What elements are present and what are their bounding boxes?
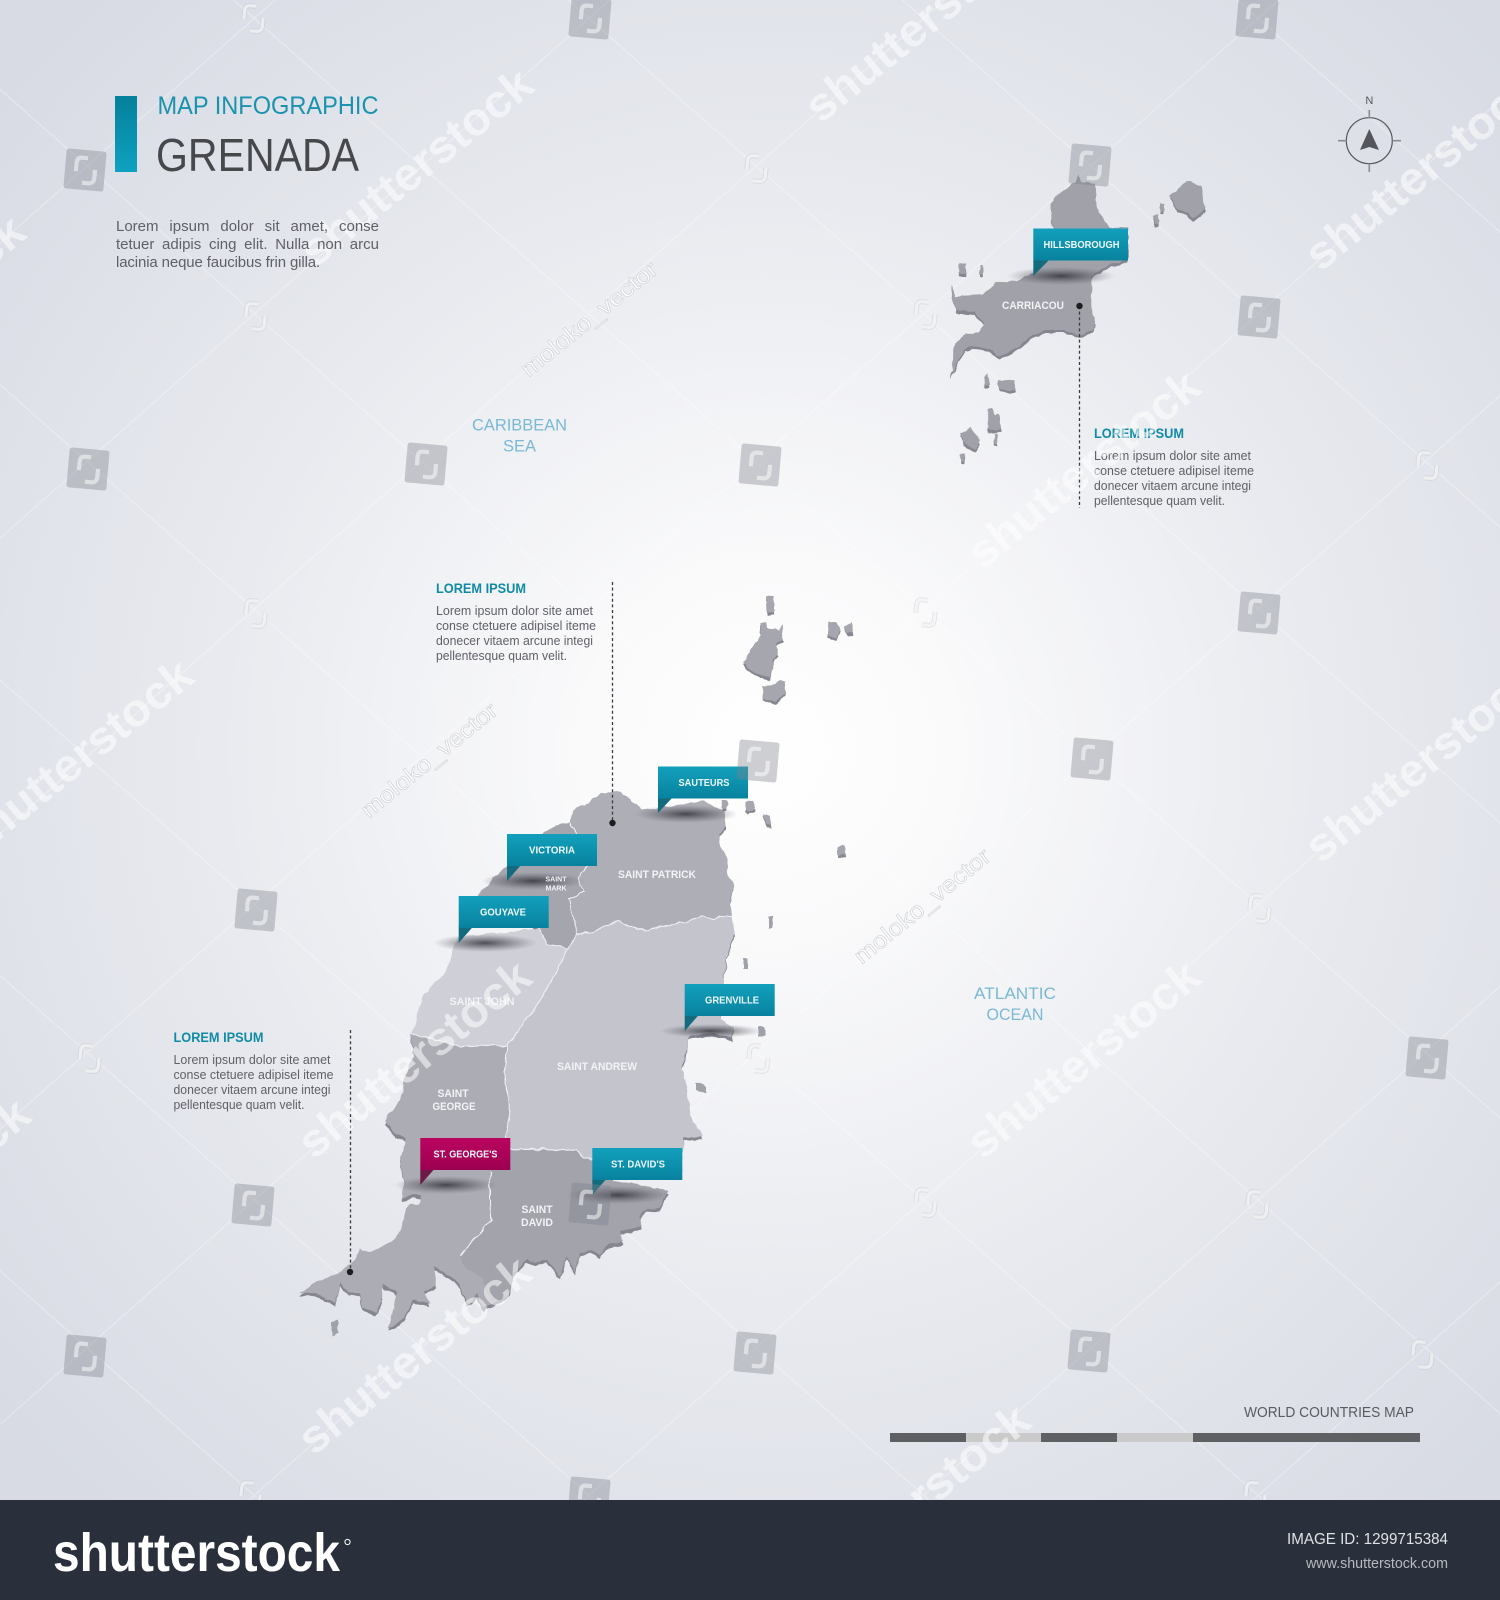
- region labels: CARRIACOU: [1002, 300, 1064, 312]
- callout: centre: LOREM IPSUM: [436, 581, 526, 596]
- scale bar: [890, 1433, 1420, 1442]
- ocean labels: [974, 984, 1056, 1024]
- watermark overlay: shutterstock: [956, 359, 1210, 578]
- region labels: SAINT: [522, 1204, 553, 1216]
- watermark overlay: moloko_vector: [356, 697, 503, 823]
- footer bar: [0, 1500, 1500, 1600]
- intro paragraph: lacinia neque faucibus frin gilla.: [116, 254, 320, 271]
- watermark overlay: shutterstock: [287, 1245, 541, 1464]
- main island map of Grenada: [300, 791, 734, 1331]
- callout: Carriacou: Lorem ipsum dolor site amet: [1094, 449, 1252, 463]
- map series caption: WORLD COUNTRIES MAP: [1244, 1405, 1414, 1421]
- callout: south-west: conse ctetuere adipisel iteme: [174, 1068, 334, 1082]
- watermark overlay: moloko_vector: [849, 843, 996, 969]
- flag: St. David's: ST. DAVID'S: [611, 1158, 665, 1170]
- flag: St. George's capital: ST. GEORGE'S: [434, 1148, 498, 1160]
- callout: Carriacou: donecer vitaem arcune integi: [1094, 479, 1251, 493]
- callout: south-west: LOREM IPSUM: [174, 1030, 264, 1045]
- footer bar: www.shutterstock.com: [1305, 1555, 1448, 1572]
- intro paragraph: [116, 218, 379, 271]
- Carriacou island map: [950, 175, 1206, 465]
- flag: Hillsborough: HILLSBOROUGH: [1044, 239, 1120, 251]
- flag: Grenville: GRENVILLE: [705, 994, 759, 1006]
- sea labels: SEA: [503, 436, 537, 456]
- sea labels: [472, 416, 567, 456]
- callout: centre: donecer vitaem arcune integi: [436, 634, 593, 648]
- compass icon: [1338, 95, 1401, 172]
- region labels: SAINT JOHN: [450, 996, 515, 1008]
- callout: south-west: pellentesque quam velit.: [174, 1098, 304, 1112]
- region: Saint George: [300, 1034, 510, 1328]
- flag: Gouyave: GOUYAVE: [480, 906, 526, 918]
- flag: Sauteurs: [658, 766, 748, 813]
- region: Saint John: [412, 928, 568, 1047]
- intro paragraph: Lorem ipsum dolor sit amet, conse: [116, 218, 379, 235]
- sea labels: CARIBBEAN: [472, 416, 567, 434]
- callout: south-west: Lorem ipsum dolor site amet: [174, 1053, 331, 1067]
- footer logo: shutterstock: [53, 1523, 341, 1583]
- watermark overlay: shutterstock: [287, 949, 541, 1168]
- small island south of Grenada: [331, 1320, 338, 1336]
- region: Saint David: [460, 1149, 668, 1304]
- flag: Victoria: [507, 834, 597, 881]
- callout: Carriacou: pellentesque quam velit.: [1094, 494, 1225, 508]
- watermark overlay: shutterstock: [956, 949, 1210, 1168]
- marker shadows: [394, 267, 1115, 1204]
- callout: Carriacou: [1094, 426, 1254, 508]
- flag: Victoria: VICTORIA: [529, 844, 575, 856]
- watermark overlay: shutterstock: [289, 57, 543, 276]
- callout: centre: [436, 581, 596, 663]
- region: Saint Patrick: [569, 791, 733, 933]
- callout: centre: conse ctetuere adipisel iteme: [436, 619, 596, 633]
- callout: south-west: donecer vitaem arcune integi: [174, 1083, 330, 1097]
- north islands group: [722, 596, 853, 858]
- callout: centre: pellentesque quam velit.: [436, 649, 567, 663]
- ocean labels: OCEAN: [986, 1005, 1044, 1024]
- watermark overlay: moloko_vector: [516, 256, 663, 382]
- flag: Hillsborough: [1033, 228, 1128, 276]
- title: Grenada: GRENADA: [156, 129, 359, 181]
- intro paragraph: tetuer adipis cing elit. Nulla non arcu: [116, 236, 379, 253]
- flag: Grenville: [685, 984, 775, 1031]
- title accent bar: [115, 96, 137, 172]
- callout: centre: Lorem ipsum dolor site amet: [436, 604, 594, 618]
- region labels: SAINT: [438, 1088, 469, 1100]
- region labels: [432, 300, 1064, 1229]
- callout: Carriacou: LOREM IPSUM: [1094, 426, 1184, 441]
- callout: south-west: [174, 1030, 334, 1112]
- callout: Carriacou: conse ctetuere adipisel iteme: [1094, 464, 1254, 478]
- region labels: MARK: [546, 886, 566, 892]
- region labels: DAVID: [521, 1217, 553, 1229]
- dotted leader lines with dots: [347, 303, 1083, 1275]
- compass icon: N: [1365, 95, 1373, 107]
- region: Saint Mark: [477, 823, 587, 948]
- title: map infographic: MAP INFOGRAPHIC: [158, 92, 378, 120]
- flag: Gouyave: [459, 896, 549, 943]
- region: Saint Andrew: [505, 915, 734, 1171]
- footer bar: IMAGE ID: 1299715384: [1287, 1531, 1448, 1548]
- region labels: SAINT ANDREW: [557, 1061, 638, 1073]
- flag: St. David's: [592, 1148, 682, 1195]
- region labels: SAINT PATRICK: [618, 869, 696, 881]
- ocean labels: ATLANTIC: [974, 984, 1056, 1003]
- region labels: SAINT: [546, 876, 567, 884]
- flag: St. George's capital: [420, 1138, 510, 1185]
- flag: Sauteurs: SAUTEURS: [678, 777, 730, 789]
- eastern small islets: [696, 916, 773, 1094]
- region labels: GEORGE: [432, 1101, 476, 1113]
